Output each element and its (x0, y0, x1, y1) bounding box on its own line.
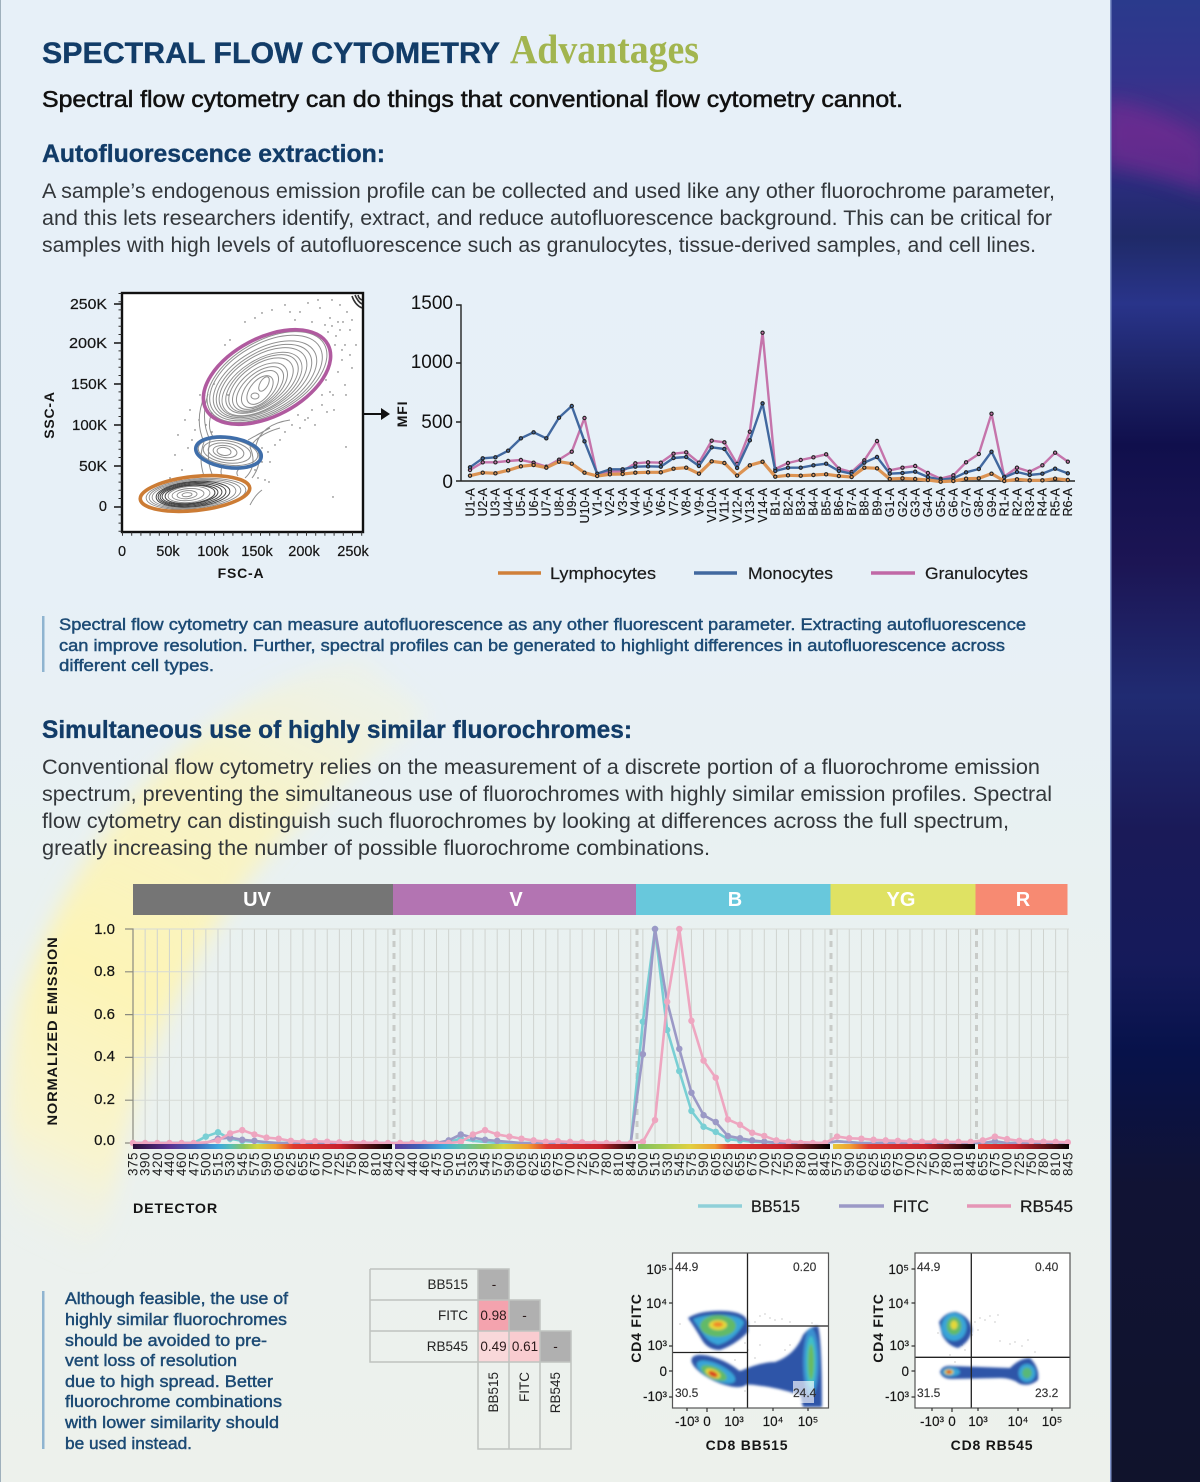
density plot: CD4 FITC vs CD8 BB515: 10⁴ (646, 1296, 667, 1311)
similarity matrix table: RB545 (548, 1372, 563, 1413)
density plot: CD4 FITC vs CD8 BB515: CD4 FITC (628, 1293, 644, 1363)
gate: granulocytes (188, 310, 346, 444)
density plot: CD4 FITC vs CD8 BB515: 24.4 (793, 1386, 817, 1400)
detector wavelength labels: 590 (696, 1152, 711, 1176)
x-axis channel labels: G7-A (959, 487, 973, 517)
gate: lymphocytes (139, 471, 251, 516)
legend: fluorochromes: RB545 (1020, 1198, 1073, 1216)
x-axis channel labels: U7-A (540, 487, 554, 516)
chart: FSC vs SSC contour plot: 250K (70, 297, 107, 313)
detector wavelength labels: 545 (235, 1152, 250, 1176)
detector wavelength labels: 725 (332, 1152, 347, 1176)
population: double negative (687, 1348, 751, 1394)
density plot: CD4 FITC vs CD8 RB545: -10³ (920, 1414, 945, 1429)
detector wavelength labels: 375 (126, 1152, 141, 1176)
detector wavelength labels: 515 (453, 1152, 468, 1176)
detector wavelength labels: 725 (1012, 1152, 1027, 1176)
chart: normalized emission spectra: 0.2 (94, 1091, 115, 1108)
x-axis channel labels: U8-A (552, 487, 566, 516)
detector wavelength labels: 545 (478, 1152, 493, 1176)
detector wavelength labels: 725 (915, 1152, 930, 1176)
gate: monocytes (194, 433, 263, 472)
detector wavelength labels: 575 (830, 1152, 845, 1176)
detector wavelength labels: 810 (951, 1152, 966, 1176)
density plot: CD4 FITC vs CD8 BB515: -10³ (675, 1414, 700, 1429)
detector wavelength labels: 515 (211, 1152, 226, 1176)
legend: fluorochromes: BB515 (751, 1198, 800, 1216)
detector wavelength labels: 605 (708, 1152, 723, 1176)
density plot: CD4 FITC vs CD8 BB515: 10⁵ (646, 1262, 667, 1277)
detector wavelength labels: 675 (550, 1152, 566, 1176)
callout: autofluorescence note: can improve resolution. Further, spectral profiles can be generated to highlight differences in autofluorescence across (59, 636, 1005, 655)
x-axis channel labels: R6-A (1061, 487, 1075, 516)
text block: autofluorescence description: samples with high levels of autofluorescence such as granulocytes, tissue-derived samples, and cell lines. (42, 234, 1036, 257)
density plot: CD4 FITC vs CD8 RB545: 44.9 (917, 1260, 941, 1274)
detector wavelength labels: 845 (1060, 1152, 1075, 1176)
density plot: CD4 FITC vs CD8 BB515: 10³ (647, 1338, 668, 1353)
detector wavelength labels: 530 (466, 1152, 480, 1176)
x-axis channel labels: R2-A (1010, 487, 1024, 516)
x-axis channel labels: V6-A (654, 487, 668, 516)
density plot: CD4 FITC vs CD8 BB515: 10⁵ (798, 1414, 818, 1429)
subtitle: Spectral flow cytometry can do things that conventional flow cytometry cannot. (42, 86, 903, 112)
scatter dots (170, 300, 356, 497)
detector wavelength labels: 810 (805, 1152, 820, 1176)
population: CD8 positive (738, 1326, 822, 1407)
x-axis channel labels: V9-A (692, 487, 706, 516)
laser header bar: V (509, 889, 523, 911)
legend: cell types: Lymphocytes (550, 564, 656, 583)
chart: FSC vs SSC contour plot: 0 (99, 499, 107, 515)
detector wavelength labels: 575 (684, 1152, 699, 1176)
density plot: CD4 FITC vs CD8 RB545: 10³ (968, 1414, 988, 1429)
chart: FSC vs SSC contour plot: 50K (79, 459, 107, 475)
x-axis channel labels: R5-A (1048, 487, 1062, 516)
callout: avoid similar fluorochromes: vent loss of resolution (65, 1351, 237, 1370)
detector wavelength labels: 605 (271, 1152, 286, 1176)
density plot: CD4 FITC vs CD8 RB545: 0.40 (1035, 1260, 1059, 1274)
legend: fluorochromes (698, 1198, 1073, 1216)
density plot: CD4 FITC vs CD8 RB545: 10³ (889, 1338, 910, 1353)
chart: FSC vs SSC contour plot: 250k (337, 544, 369, 560)
legend: cell types: Granulocytes (925, 564, 1028, 583)
x-axis channel labels: B4-A (807, 487, 821, 516)
chart: MFI line chart (394, 293, 1075, 523)
detector wavelength labels: 845 (380, 1152, 396, 1176)
density plot: CD4 FITC vs CD8 BB515: 44.9 (675, 1260, 699, 1274)
detector wavelength labels: 390 (138, 1152, 153, 1176)
x-axis channel labels: G9-A (985, 487, 999, 517)
callout: autofluorescence note: Spectral flow cytometry can measure autofluorescence as any other fluorescent parameter. Extracting autofluorescence (59, 615, 1026, 634)
density plot: CD4 FITC vs CD8 RB545: CD8 RB545 (951, 1437, 1033, 1453)
similarity matrix table: BB515 (486, 1372, 501, 1413)
arrow: scatter plot to MFI chart (363, 408, 390, 420)
density plot: CD4 FITC vs CD8 RB545: 10⁴ (888, 1296, 909, 1311)
text block: similar fluorochromes description: flow cytometry can distinguish such fluorochromes by looking at differences across the full spectrum, (42, 810, 1009, 833)
x-axis channel labels: B2-A (781, 487, 795, 516)
detector wavelength labels: 845 (963, 1152, 978, 1176)
frame and axes (122, 293, 363, 532)
chart: normalized emission spectra: DETECTOR (133, 1200, 218, 1216)
x-axis channel labels: U3-A (489, 487, 503, 516)
detector wavelength labels: 590 (259, 1152, 274, 1176)
chart: MFI line chart: 1500 (411, 293, 453, 314)
x-axis channel labels: U9-A (565, 487, 579, 516)
detector wavelength labels: 725 (769, 1152, 784, 1176)
detector wavelength labels: 700 (903, 1152, 918, 1176)
detector wavelength labels: 625 (283, 1152, 298, 1176)
chart: FSC vs SSC contour plot: 100k (197, 544, 229, 560)
detector wavelength labels: 700 (563, 1152, 578, 1176)
x-axis channel labels: U1-A (463, 487, 477, 516)
text block: autofluorescence description (42, 180, 1055, 257)
x-axis channel labels: G2-A (896, 487, 910, 517)
callout: avoid similar fluorochromes: Although feasible, the use of (65, 1289, 288, 1308)
detector wavelength labels: 530 (660, 1152, 675, 1176)
detector wavelength labels: 845 (818, 1152, 833, 1176)
detector wavelength labels: 750 (927, 1152, 942, 1176)
chart: FSC vs SSC contour plot: SSC-A (41, 391, 57, 439)
laser header bar: YG (887, 889, 915, 911)
granulocyte contours (192, 313, 342, 441)
callout: avoid similar fluorochromes (42, 1289, 288, 1453)
density plot: CD4 FITC vs CD8 BB515: -10³ (643, 1389, 667, 1404)
series: monocytes (470, 403, 1068, 480)
detector wavelength labels: 515 (648, 1152, 663, 1176)
x-axis channel labels: G5-A (934, 487, 948, 517)
text block: similar fluorochromes description (42, 756, 1052, 860)
detector wavelength labels: 655 (733, 1152, 748, 1176)
x-axis channel labels: V3-A (616, 487, 630, 516)
x-axis channel labels: G4-A (921, 487, 935, 517)
density plot: CD4 FITC vs CD8 BB515: CD8 BB515 (706, 1437, 788, 1453)
chart: MFI line chart: 1000 (411, 352, 453, 373)
x-axis channel labels: V7-A (667, 487, 681, 516)
detector wavelength labels: 810 (1048, 1152, 1063, 1176)
detector wavelength labels: 500 (198, 1152, 213, 1176)
callout: avoid similar fluorochromes: fluorochrome combinations (65, 1392, 282, 1411)
detector wavelength labels: 780 (1036, 1152, 1051, 1176)
x-axis channel labels: G1-A (883, 487, 897, 517)
similarity matrix table (370, 1269, 571, 1449)
x-axis channel labels: G6-A (947, 487, 961, 517)
contour connecting lines (199, 394, 290, 505)
chart: normalized emission spectra: 0.0 (94, 1132, 115, 1149)
detector wavelength labels: 780 (599, 1152, 614, 1176)
detector wavelength labels: 605 (514, 1152, 529, 1176)
heading: autofluorescence extraction: Autofluorescence extraction: (42, 140, 385, 168)
heading: similar fluorochromes: Simultaneous use of highly similar fluorochromes: (42, 716, 632, 744)
chart: FSC vs SSC contour plot: 50k (156, 544, 180, 560)
detector wavelength labels: 750 (587, 1152, 602, 1176)
x-axis channel labels: B9-A (870, 487, 884, 516)
chart: normalized emission spectra: 0.8 (94, 963, 115, 980)
x-axis channel labels: U5-A (514, 487, 528, 516)
callout: avoid similar fluorochromes: highly similar fluorochromes (65, 1310, 287, 1329)
title (42, 26, 699, 72)
density plot: CD4 FITC vs CD8 RB545: 0 (948, 1414, 956, 1429)
detector wavelength labels: 780 (939, 1152, 954, 1176)
chart: normalized emission spectra: NORMALIZED EMISSION (44, 936, 60, 1126)
title: SPECTRAL FLOW CYTOMETRY (42, 37, 500, 70)
quadrant gates and frame (672, 1253, 828, 1408)
chart: FSC vs SSC contour plot: 200K (69, 336, 107, 352)
detector wavelength labels: 460 (417, 1152, 432, 1176)
similarity matrix table: - (522, 1308, 527, 1323)
chart: FSC vs SSC contour plot: 200k (288, 544, 320, 560)
x-axis channel labels: V12-A (730, 487, 744, 523)
density plot: CD4 FITC vs CD8 BB515: 0 (703, 1414, 711, 1429)
detector wavelength labels (126, 1152, 1075, 1176)
title: Advantages (510, 26, 699, 72)
detector wavelength labels: 655 (538, 1152, 553, 1176)
x-axis channel labels: R4-A (1036, 487, 1050, 516)
x-axis channel labels: V13-A (743, 487, 757, 523)
detector wavelength labels: 810 (368, 1152, 383, 1176)
callout: avoid similar fluorochromes: due to high spread. Better (65, 1372, 273, 1391)
similarity matrix table: 0.61 (512, 1339, 538, 1354)
density plot: CD4 FITC vs CD8 RB545: 23.2 (1035, 1386, 1059, 1400)
detector wavelength labels: 500 (441, 1152, 456, 1176)
quadrant gates and frame (915, 1253, 1070, 1408)
x-axis channel labels: R3-A (1023, 487, 1037, 516)
text block: similar fluorochromes description: greatly increasing the number of possible fluorochrome combinations. (42, 837, 710, 860)
detector wavelength labels: 545 (672, 1152, 687, 1176)
density plot: CD4 FITC vs CD8 RB545: 10⁵ (1042, 1414, 1062, 1429)
x-axis channel labels: B5-A (820, 487, 834, 516)
detector wavelength labels: 500 (636, 1152, 650, 1176)
detector wavelength labels: 625 (720, 1152, 736, 1176)
lymphocyte contours (145, 475, 247, 513)
detector wavelength labels: 675 (308, 1152, 323, 1176)
sparse events (938, 1315, 1035, 1362)
detector wavelength labels: 780 (356, 1152, 371, 1176)
x-axis channel labels: B7-A (845, 487, 859, 516)
detector wavelength labels: 590 (502, 1152, 517, 1176)
x-axis channel labels: B3-A (794, 487, 808, 516)
density plot: CD4 FITC vs CD8 RB545: 10⁵ (888, 1262, 909, 1277)
detector wavelength labels: 420 (150, 1152, 165, 1176)
chart: FSC vs SSC contour plot: 150k (241, 544, 273, 560)
detector wavelength labels: 605 (854, 1152, 869, 1176)
detector wavelength labels: 575 (490, 1152, 505, 1176)
similarity matrix table: 0.98 (480, 1308, 507, 1323)
legend: cell types (498, 564, 1028, 583)
similarity matrix table: BB515 (427, 1277, 468, 1292)
x-axis channel labels: U10-A (578, 487, 592, 523)
density plot: CD4 FITC vs CD8 RB545: -10³ (885, 1389, 909, 1404)
detector wavelength labels: 575 (247, 1152, 262, 1176)
detector wavelength labels: 750 (781, 1152, 796, 1176)
laser header bar: B (728, 889, 742, 911)
x-axis channel labels: R1-A (998, 487, 1012, 516)
x-axis channel labels: U6-A (527, 487, 541, 516)
callout: avoid similar fluorochromes: should be avoided to pre- (65, 1331, 267, 1350)
x-axis channel labels: G3-A (908, 487, 922, 517)
detector wavelength labels: 700 (757, 1152, 772, 1176)
similarity matrix table: - (553, 1339, 558, 1354)
monocyte contours (196, 435, 260, 469)
detector wavelength labels: 625 (526, 1152, 541, 1176)
chart: normalized emission spectra: 1.0 (94, 921, 115, 938)
text block: similar fluorochromes description: Conventional flow cytometry relies on the measurement of a discrete portion of a fluorochrome emission (42, 756, 1040, 779)
x-axis channel labels: V1-A (590, 487, 604, 516)
chart: normalized emission spectra: 0.4 (94, 1048, 115, 1065)
similarity matrix table: RB545 (427, 1339, 468, 1354)
similarity matrix table: FITC (517, 1372, 532, 1402)
corner cluster (352, 295, 362, 308)
x-axis channel labels: V10-A (705, 487, 719, 523)
x-axis channel labels: V2-A (603, 487, 617, 516)
text block: autofluorescence description: and this lets researchers identify, extract, and reduce autofluorescence background. This can be critical for (42, 207, 1052, 230)
laser header bar: R (1016, 889, 1031, 911)
callout: autofluorescence note (42, 615, 1026, 675)
detector wavelength labels: 655 (975, 1152, 990, 1176)
detector wavelength labels: 750 (1024, 1152, 1039, 1176)
x-axis channel labels: V5-A (641, 487, 655, 516)
detector wavelength labels: 420 (393, 1152, 408, 1176)
detector wavelength labels: 700 (320, 1152, 335, 1176)
density plot: CD4 FITC vs CD8 RB545 (870, 1253, 1070, 1453)
x-axis channel labels: V8-A (680, 487, 694, 516)
x-axis channel labels: G8-A (972, 487, 986, 517)
legend: cell types: Monocytes (748, 564, 833, 583)
chart: MFI line chart: 500 (421, 412, 453, 433)
detector wavelength labels: 655 (878, 1152, 893, 1176)
laser header bar: UV (243, 889, 272, 911)
detector wavelength labels: 655 (296, 1152, 311, 1176)
x-axis channel labels: V14-A (756, 487, 770, 523)
detector wavelength labels: 475 (429, 1152, 444, 1176)
legend: fluorochromes: FITC (893, 1198, 929, 1216)
sparse events (680, 1314, 812, 1391)
similarity matrix table: - (492, 1277, 496, 1292)
x-axis channel labels: B6-A (832, 487, 846, 516)
x-axis channel labels: U2-A (476, 487, 490, 516)
detector wavelength labels: 810 (611, 1152, 626, 1176)
detector wavelength labels: 590 (842, 1152, 857, 1176)
chart: FSC vs SSC contour plot (41, 293, 369, 581)
detector wavelength labels: 440 (162, 1152, 177, 1176)
detector wavelength labels: 780 (793, 1152, 808, 1176)
detector wavelength labels: 440 (405, 1152, 420, 1176)
density plot: CD4 FITC vs CD8 RB545: 31.5 (917, 1386, 941, 1400)
detector wavelength labels: 750 (344, 1152, 359, 1176)
series: granulocytes (470, 333, 1068, 479)
callout: autofluorescence note: different cell types. (59, 656, 214, 675)
population: CD4 positive (939, 1312, 972, 1348)
text block: similar fluorochromes description: spectrum, preventing the simultaneous use of fluorochromes with highly similar emission profiles. Spectral (42, 783, 1052, 806)
chart: FSC vs SSC contour plot: 0 (118, 544, 126, 560)
density plot: CD4 FITC vs CD8 BB515: 10³ (724, 1414, 744, 1429)
detector wavelength labels: 475 (186, 1152, 201, 1176)
callout: avoid similar fluorochromes: with lower similarity should (64, 1413, 279, 1432)
text block: autofluorescence description: A sample’s endogenous emission profile can be collected and used like any other fluorochrome parameter, (42, 180, 1055, 203)
density plot: CD4 FITC vs CD8 BB515: 0 (659, 1364, 667, 1379)
series: RB545 (133, 929, 1068, 1143)
series: FITC (133, 929, 1068, 1143)
laser header bar (133, 884, 1068, 915)
series: BB515 (133, 929, 1068, 1143)
detector wavelength labels: 725 (575, 1152, 590, 1176)
density plot: CD4 FITC vs CD8 RB545: 10⁴ (1008, 1414, 1029, 1429)
density plot: CD4 FITC vs CD8 RB545: CD4 FITC (870, 1293, 886, 1363)
chart: FSC vs SSC contour plot: 150K (71, 377, 107, 393)
density plot: CD4 FITC vs CD8 BB515: 30.5 (675, 1386, 699, 1400)
similarity matrix table: FITC (438, 1308, 468, 1323)
density plot: CD4 FITC vs CD8 BB515: 10⁴ (763, 1414, 784, 1429)
detector wavelength labels: 460 (174, 1152, 189, 1176)
population: CD4 positive (688, 1311, 748, 1350)
x-axis channel labels: V11-A (718, 487, 732, 522)
detector wavelength labels: 845 (623, 1152, 638, 1176)
chart: normalized emission spectra: 0.6 (94, 1006, 115, 1023)
x-axis channel labels: B1-A (769, 487, 783, 516)
x-axis channel labels: U4-A (502, 487, 516, 516)
side panel: dark nebula band (1105, 0, 1200, 1482)
callout: avoid similar fluorochromes: be used instead. (65, 1434, 192, 1453)
population: CD8 band (940, 1358, 1038, 1385)
chart: MFI line chart: 0 (442, 472, 453, 493)
spectrum colour bar (133, 1144, 1069, 1149)
detector wavelength labels: 675 (745, 1152, 760, 1176)
x-axis channel labels: B8-A (858, 487, 872, 516)
similarity matrix table: 0.49 (480, 1339, 507, 1354)
density plot: CD4 FITC vs CD8 BB515 (628, 1253, 828, 1453)
detector wavelength labels: 625 (866, 1152, 881, 1176)
detector wavelength labels: 675 (988, 1152, 1002, 1176)
series: lymphocytes (470, 461, 1068, 482)
detector wavelength labels: 675 (890, 1152, 905, 1176)
density plot: CD4 FITC vs CD8 BB515: 0.20 (793, 1260, 817, 1274)
chart: FSC vs SSC contour plot: FSC-A (218, 565, 264, 581)
detector wavelength labels: 700 (1000, 1152, 1015, 1176)
density plot: CD4 FITC vs CD8 RB545: 0 (901, 1364, 909, 1379)
x-axis channel labels: V4-A (629, 487, 643, 516)
chart: FSC vs SSC contour plot: 100K (72, 418, 107, 434)
detector wavelength labels: 530 (223, 1152, 238, 1176)
chart: MFI line chart: MFI (394, 401, 410, 427)
x-axis channel labels (463, 487, 1075, 523)
chart: normalized emission spectra (44, 921, 1075, 1216)
